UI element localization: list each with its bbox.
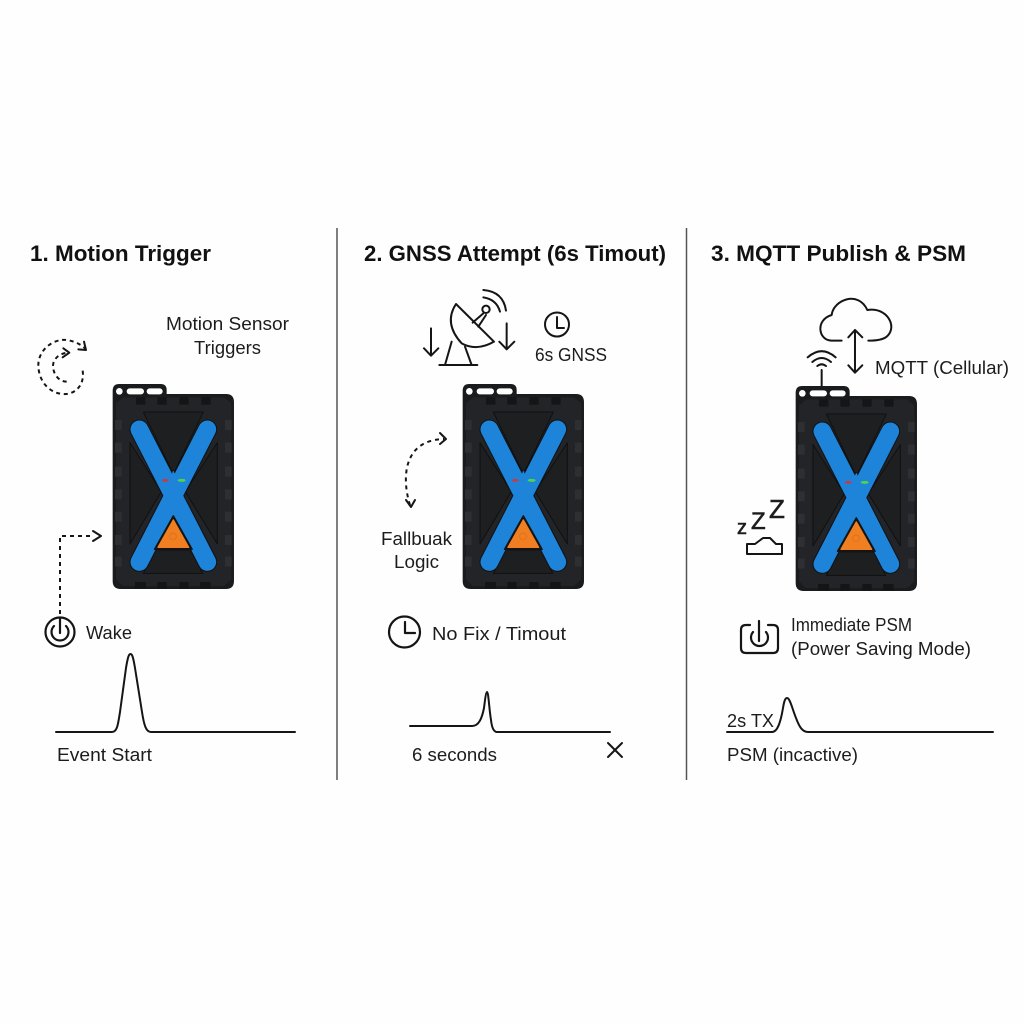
icon: clock small: [545, 312, 569, 336]
label: wake: Wake: [86, 623, 132, 643]
device: tracker: [463, 384, 584, 589]
chart: wake pulse: [56, 654, 295, 732]
label: 6 seconds: 6 seconds: [412, 745, 497, 765]
divider 1: [336, 228, 338, 780]
panel: motion trigger: [30, 241, 295, 765]
arrow: dashed wake path: [60, 531, 101, 614]
device: tracker: [113, 384, 234, 589]
label: 6s GNSS: 6s GNSS: [535, 345, 607, 365]
icon: sleeping zzz: Z: [751, 508, 766, 535]
label: fallback logic: Logic: [394, 552, 439, 572]
icon: dashed rotation arrows: [38, 340, 86, 394]
heading: 1. Motion Trigger: 1. Motion Trigger: [30, 241, 211, 266]
icon: sleeping zzz: z: [737, 517, 747, 539]
chart: GNSS pulse: [410, 692, 610, 732]
label: motion sensor triggers: Triggers: [194, 338, 261, 358]
label: motion sensor triggers: Motion Sensor: [166, 314, 289, 334]
divider 2: [686, 228, 688, 780]
label: 2s TX: 2s TX: [727, 711, 774, 731]
arrow: dashed fallback curve: [406, 433, 446, 507]
icon: wifi antenna: [808, 351, 836, 386]
chart: TX pulse: [727, 698, 993, 732]
label: fallback logic: Fallbuak: [381, 529, 453, 549]
panel: MQTT publish and PSM: [711, 241, 1009, 765]
heading: 2. GNSS Attempt: 2. GNSS Attempt (6s Timout): [364, 241, 666, 266]
label: immediate PSM: Immediate PSM: [791, 615, 912, 635]
label: event start: Event Start: [57, 745, 152, 765]
heading: 3. MQTT Publish & PSM: 3. MQTT Publish & PSM: [711, 241, 966, 266]
icon: fail cross: [608, 743, 622, 757]
icon: sleeping zzz: Z: [769, 494, 785, 524]
icon: cloud with two-way arrow: [820, 299, 891, 373]
icon: sleeping zzz: [737, 494, 785, 554]
label: no fix timeout: No Fix / Timout: [432, 624, 566, 644]
label: MQTT cellular: MQTT (Cellular): [875, 358, 1009, 378]
label: immediate PSM: (Power Saving Mode): [791, 639, 971, 659]
icon: satellite dish with arrows: [424, 290, 514, 365]
panel: GNSS attempt: [364, 241, 666, 765]
icon: power wake: [46, 618, 74, 646]
device: tracker: [796, 386, 917, 591]
icon: clock large: [389, 616, 420, 648]
label: PSM inactive: PSM (incactive): [727, 745, 858, 765]
icon: power box: [741, 621, 778, 653]
